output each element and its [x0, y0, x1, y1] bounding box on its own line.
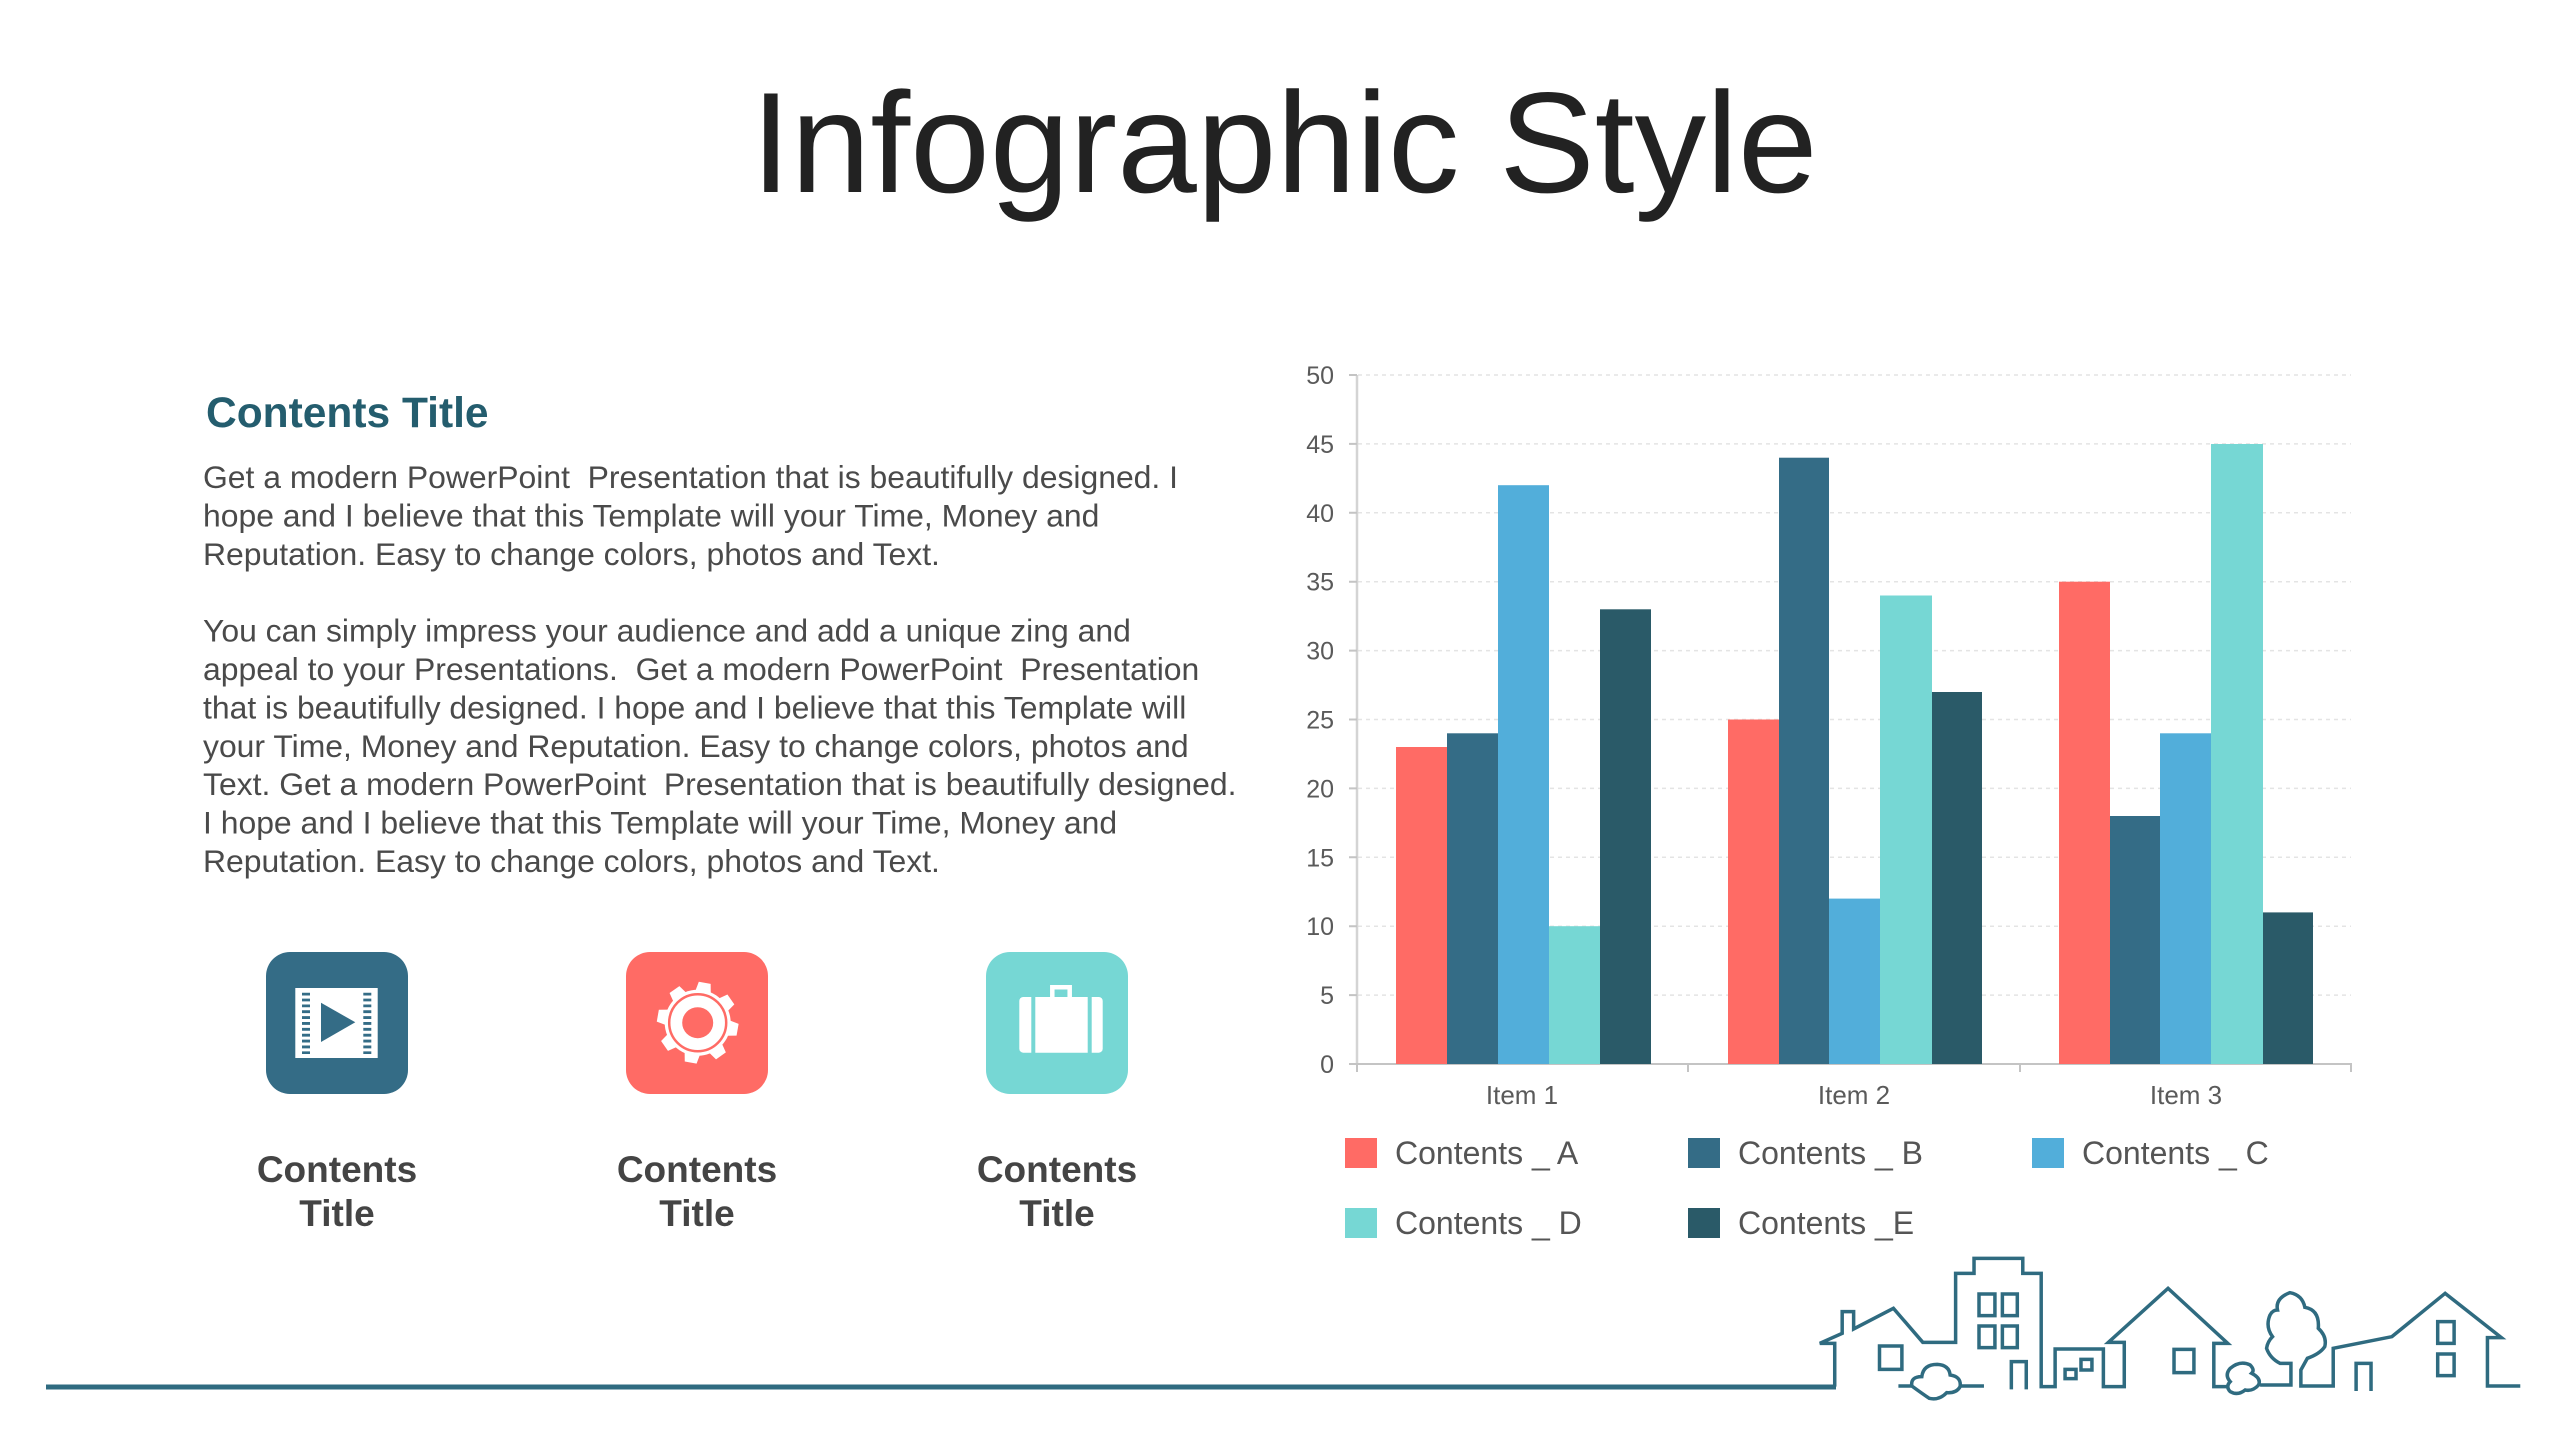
skyline illustration with baseline [46, 1258, 2520, 1399]
y axis labels: 35 [1306, 569, 1334, 597]
y axis labels: 25 [1306, 706, 1334, 734]
bar chart [1306, 362, 2352, 1241]
label: contents title: Contents [257, 1149, 417, 1190]
icon: town skyline [1820, 1258, 2520, 1399]
label: contents title [617, 1149, 777, 1234]
legend: Contents _ A [1395, 1135, 1579, 1171]
icon: gear [626, 952, 768, 1094]
y axis labels [1306, 362, 1334, 1079]
text block: second paragraph: You can simply impress your audience and add a unique zing and [203, 613, 1131, 649]
heading: contents title: Contents Title [206, 390, 489, 437]
text block: first paragraph: hope and I believe that this Template will your Time, Money and [203, 497, 1099, 533]
legend: Contents _ C [2082, 1135, 2269, 1171]
text block: second paragraph: I hope and I believe that this Template will your Time, Money and [203, 805, 1117, 841]
icon: film play [266, 952, 408, 1094]
legend: Contents _ B [1738, 1135, 1923, 1171]
text block: first paragraph: Get a modern PowerPoint Presentation that is beautifully designed. I [203, 459, 1178, 495]
legend: Contents _E [1738, 1205, 1914, 1241]
label: contents title: Contents [617, 1149, 777, 1190]
chart grid lines and axes [1349, 375, 2352, 1072]
text block: second paragraph: your Time, Money and Reputation. Easy to change colors, photos and [203, 728, 1189, 764]
text block: first paragraph: Reputation. Easy to change colors, photos and Text. [203, 536, 940, 572]
title: Infographic Style [751, 63, 1818, 223]
x axis labels: Item 1 [1486, 1080, 1558, 1110]
label: contents title [977, 1149, 1137, 1234]
x axis labels: Item 3 [2150, 1080, 2222, 1110]
label: contents title: Title [299, 1193, 375, 1234]
label: contents title [257, 1149, 417, 1234]
bars: item 1 [1396, 485, 1651, 1064]
text block: second paragraph [203, 613, 1236, 879]
panel: film feature [257, 952, 417, 1234]
label: contents title: Title [659, 1193, 735, 1234]
text block: second paragraph: Text. Get a modern PowerPoint Presentation that is beautifully designed. [203, 766, 1236, 802]
text block: second paragraph: that is beautifully designed. I hope and I believe that this Template will [203, 689, 1186, 725]
y axis labels: 50 [1306, 362, 1334, 390]
icon: suitcase [986, 952, 1128, 1094]
y axis labels: 5 [1320, 982, 1334, 1010]
y axis labels: 0 [1320, 1051, 1334, 1079]
bars: item 2 [1728, 458, 1982, 1064]
label: contents title: Contents [977, 1149, 1137, 1190]
label: contents title: Title [1019, 1193, 1095, 1234]
baseline rule [46, 1384, 1836, 1390]
y axis labels: 15 [1306, 844, 1334, 872]
panel: gear feature [617, 952, 777, 1234]
y axis labels: 20 [1306, 775, 1334, 803]
text block: first paragraph [203, 459, 1178, 572]
y axis labels: 45 [1306, 431, 1334, 459]
text block: second paragraph: Reputation. Easy to change colors, photos and Text. [203, 843, 940, 879]
x axis labels [1486, 1080, 2222, 1110]
x axis labels: Item 2 [1818, 1080, 1890, 1110]
legend [1345, 1135, 2269, 1241]
y axis labels: 40 [1306, 500, 1334, 528]
y axis labels: 30 [1306, 638, 1334, 666]
bars: item 3 [2059, 444, 2313, 1064]
panel: suitcase feature [977, 952, 1137, 1234]
legend: Contents _ D [1395, 1205, 1582, 1241]
y axis labels: 10 [1306, 913, 1334, 941]
text block: second paragraph: appeal to your Presentations. Get a modern PowerPoint Presentation [203, 651, 1199, 687]
panel: text content [203, 390, 1236, 879]
